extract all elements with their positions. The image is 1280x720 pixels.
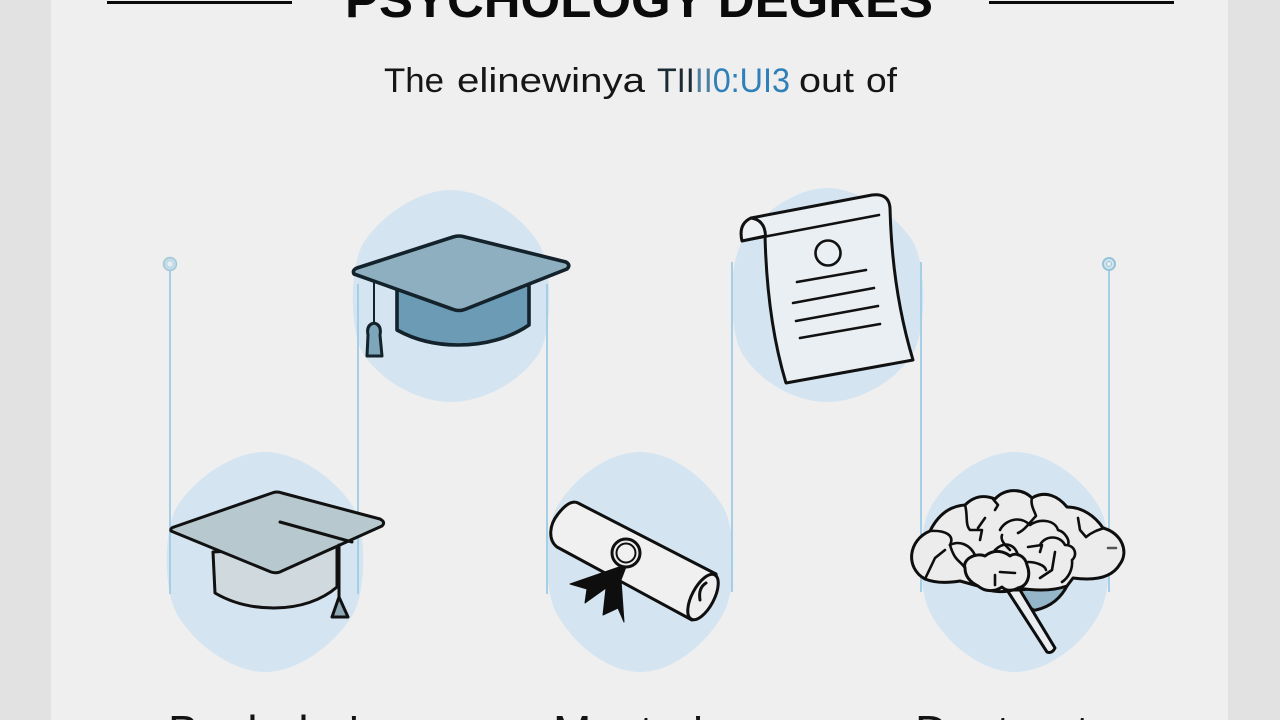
pin left bbox=[164, 258, 176, 270]
icon: certificate bbox=[741, 195, 913, 383]
blob: bachelor background bbox=[167, 452, 363, 672]
subtitle: out bbox=[799, 62, 855, 100]
connector lines bbox=[170, 262, 1109, 594]
icon: master cap bbox=[353, 236, 569, 356]
blob: doctorate background bbox=[921, 452, 1109, 672]
subtitle: The bbox=[384, 62, 444, 100]
icon: bachelor cap bbox=[171, 492, 384, 617]
blob: master diploma background bbox=[547, 452, 733, 672]
subtitle bbox=[384, 62, 898, 100]
subtitle: TIIII0:UI3 bbox=[657, 62, 790, 100]
icon: brain bbox=[912, 491, 1124, 652]
pin right bbox=[1103, 258, 1115, 270]
subtitle: of bbox=[866, 62, 898, 100]
subtitle: elinewinya bbox=[457, 62, 645, 100]
title rule left bbox=[107, 1, 292, 4]
title rule right bbox=[989, 1, 1174, 4]
icon: diploma scroll bbox=[551, 502, 724, 624]
blob: certificate background bbox=[732, 188, 923, 402]
blob: master cap background bbox=[353, 190, 549, 402]
